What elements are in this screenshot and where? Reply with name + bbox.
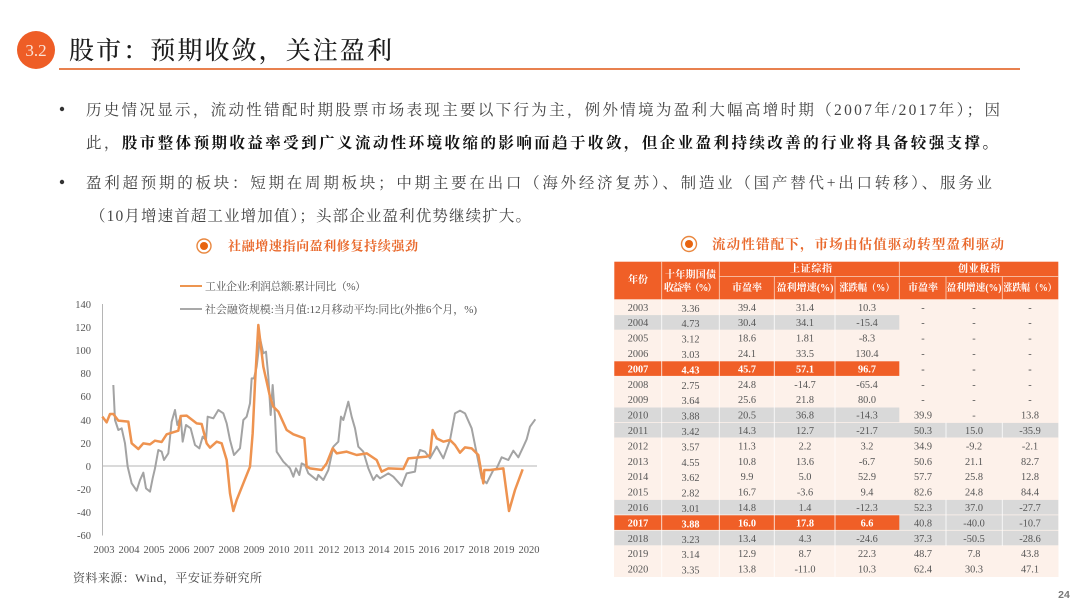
y axis labels: -60 (77, 531, 91, 542)
row 2016: 2016 (628, 503, 648, 514)
row 2013: 13.6 (796, 457, 814, 468)
row 2008: 2008 (628, 380, 648, 391)
row 2018: -50.5 (963, 534, 985, 545)
row 2003 (628, 303, 1032, 315)
row 2017 highlighted: -10.7 (1019, 518, 1041, 529)
row 2019: 8.7 (799, 549, 811, 560)
text block: bullet points: （10月增速首超工业增加值）；头部企业盈利优势继续扩大。 (90, 206, 531, 225)
row 2005: 3.12 (681, 335, 700, 346)
row 2018: 13.4 (738, 534, 756, 545)
row 2019: 43.8 (1021, 549, 1039, 560)
row 2009: 25.6 (738, 395, 756, 406)
row 2015: 9.4 (861, 488, 873, 499)
row 2010: 13.8 (1021, 411, 1039, 422)
table header: 创业板指 (958, 262, 1000, 275)
row 2014: 52.9 (858, 472, 876, 483)
row 2013: 82.7 (1021, 457, 1039, 468)
x axis labels: 2007 (194, 545, 214, 556)
row 2003: 10.3 (858, 303, 876, 314)
row 2019 (628, 549, 1039, 561)
x axis labels: 2009 (244, 545, 264, 556)
row 2007 highlighted: - (921, 364, 925, 375)
chart legend (180, 279, 477, 316)
row 2004: -15.4 (856, 318, 878, 329)
row 2012: -2.1 (1022, 441, 1038, 452)
row 2020: 47.1 (1021, 565, 1039, 576)
row 2006: - (972, 349, 976, 360)
x axis labels: 2018 (468, 545, 490, 556)
page number: 24 (1058, 589, 1070, 601)
row 2014: 9.9 (741, 472, 753, 483)
row 2020: -11.0 (794, 565, 816, 576)
table header: 上证综指 (790, 262, 832, 275)
x axis labels: 2005 (144, 545, 164, 556)
row 2016: 1.4 (799, 503, 811, 514)
y axis labels (75, 300, 91, 542)
row 2004: - (1028, 318, 1032, 329)
table header: 市盈率 (732, 282, 763, 294)
row 2008: -65.4 (856, 380, 878, 391)
table header: 十年期国债 (665, 268, 716, 281)
row 2013: 21.1 (965, 457, 983, 468)
text block: bullet points: 历史情况显示，流动性错配时期股票市场表现主要以下行为主，例外情境为盈利大幅高增时期（2007年/2017年）；因 (86, 100, 1000, 119)
row 2003: 39.4 (738, 303, 756, 314)
row 2007 highlighted: 2007 (628, 364, 648, 375)
row 2014: 12.8 (1021, 472, 1039, 483)
row 2009: - (1028, 395, 1032, 406)
row 2003: 31.4 (796, 303, 814, 314)
y axis labels: 120 (75, 323, 91, 334)
row 2013: 4.55 (681, 458, 700, 469)
row 2017 highlighted (614, 515, 1058, 530)
y axis labels: 0 (86, 462, 91, 473)
row 2014: 25.8 (965, 472, 983, 483)
row 2018: -24.6 (856, 534, 878, 545)
row 2017 highlighted: 16.0 (738, 518, 756, 529)
title underline (59, 68, 1020, 70)
x axis labels: 2013 (344, 545, 364, 556)
chart heading: 社融增速指向盈利修复持续强劲 (228, 238, 418, 254)
row 2020: 3.35 (681, 566, 700, 577)
x axis labels: 2011 (294, 545, 314, 556)
row 2005: - (972, 334, 976, 345)
row 2011: 12.7 (796, 426, 814, 437)
row 2015: 84.4 (1021, 488, 1039, 499)
table (614, 262, 1058, 577)
row 2016: 3.01 (681, 504, 700, 515)
row 2009: - (921, 395, 925, 406)
row 2012: 2012 (628, 441, 648, 452)
row 2010: 3.88 (681, 412, 700, 423)
row 2009: - (972, 395, 976, 406)
y axis labels: -40 (77, 508, 91, 519)
row 2003: - (921, 303, 925, 314)
row 2006: - (1028, 349, 1032, 360)
row 2015: 82.6 (914, 488, 932, 499)
row 2010: - (972, 411, 976, 422)
row 2009: 2009 (628, 395, 648, 406)
text block: bullet points: 盈利超预期的板块：短期在周期板块；中期主要在出口（海外经济复苏）、制造业（国产替代+出口转移）、服务业 (86, 173, 992, 192)
row 2010: -14.3 (856, 411, 878, 422)
row 2014: 5.0 (799, 472, 811, 483)
row 2006: 3.03 (681, 350, 700, 361)
row 2017 highlighted: -40.0 (963, 518, 985, 529)
row 2019: 3.14 (681, 550, 700, 561)
row 2016: 52.3 (914, 503, 932, 514)
row 2010: 39.9 (914, 411, 932, 422)
row 2014: 2014 (628, 472, 648, 483)
x axis labels: 2014 (368, 545, 390, 556)
row 2019: 48.7 (914, 549, 932, 560)
row 2011 (614, 423, 1058, 438)
row 2018: 4.3 (799, 534, 811, 545)
y axis labels: -20 (77, 485, 91, 496)
row 2012: 3.2 (861, 441, 873, 452)
row 2016: 14.8 (738, 503, 756, 514)
row 2014 (628, 472, 1039, 484)
row 2017 highlighted: 40.8 (914, 518, 932, 529)
row 2007 highlighted: - (1028, 364, 1032, 375)
row 2016 (614, 500, 1058, 515)
row 2008: - (1028, 380, 1032, 391)
x axis labels: 2017 (444, 545, 464, 556)
row 2009 (628, 395, 1032, 407)
row 2016: -27.7 (1019, 503, 1041, 514)
row 2017 highlighted: 2017 (628, 518, 648, 529)
text block: bullet points: 此，股市整体预期收益率受到广义流动性环境收缩的影响而趋于收敛，但企业盈利持续改善的行业将具备较强支撑。 (86, 133, 998, 153)
chart legend: 工业企业:利润总额:累计同比（%） (205, 279, 366, 293)
y axis labels: 100 (75, 346, 91, 357)
row 2011: 2011 (628, 426, 648, 437)
y axis labels: 20 (80, 439, 91, 450)
row 2011: -35.9 (1019, 426, 1041, 437)
row 2007 highlighted: 57.1 (796, 364, 814, 375)
row 2010: 2010 (628, 411, 648, 422)
row 2007 highlighted (614, 361, 1032, 376)
row 2008: 24.8 (738, 380, 756, 391)
series: industrial profit (orange) (102, 325, 523, 511)
table header: 年份 (628, 273, 648, 286)
row 2017 highlighted: 6.6 (861, 518, 873, 529)
row 2019: 2019 (628, 549, 648, 560)
row 2015: 24.8 (965, 488, 983, 499)
x axis labels: 2008 (218, 545, 240, 556)
x axis labels: 2010 (268, 545, 290, 556)
table header: 盈利增速(%) (776, 281, 834, 294)
row 2010: 36.8 (796, 411, 814, 422)
row 2016: 37.0 (965, 503, 983, 514)
chart source note: 资料来源：Wind，平安证券研究所 (73, 570, 262, 585)
row 2006 (628, 349, 1032, 361)
title: 股市：预期收敛，关注盈利 (69, 37, 392, 65)
table header (614, 262, 1058, 299)
row 2008: 2.75 (681, 381, 700, 392)
row 2009: 3.64 (681, 396, 700, 407)
row 2006: 130.4 (855, 349, 879, 360)
row 2013: -6.7 (859, 457, 875, 468)
row 2018 (614, 531, 1058, 546)
y axis labels: 140 (75, 300, 91, 311)
row 2019: 12.9 (738, 549, 756, 560)
row 2018: 37.3 (914, 534, 932, 545)
row 2014: 3.62 (681, 473, 700, 484)
x axis labels: 2016 (418, 545, 440, 556)
row 2020: 13.8 (738, 565, 756, 576)
row 2020: 30.3 (965, 565, 983, 576)
row 2005: 1.81 (796, 334, 814, 345)
row 2012: 3.57 (681, 442, 700, 453)
x axis labels (94, 545, 540, 556)
table background (614, 299, 1058, 577)
row 2006: 2006 (628, 349, 648, 360)
row 2008 (628, 380, 1032, 392)
row 2009: 80.0 (858, 395, 876, 406)
row 2018: -28.6 (1019, 534, 1041, 545)
row 2011: 50.3 (914, 426, 932, 437)
x axis labels: 2020 (518, 545, 540, 556)
row 2010 (614, 408, 1039, 423)
row 2020: 2020 (628, 565, 648, 576)
row 2008: - (972, 380, 976, 391)
section number badge (17, 31, 55, 69)
row 2020 (628, 565, 1039, 577)
row 2004: 34.1 (796, 318, 814, 329)
y axis labels: 60 (80, 392, 91, 403)
section number badge: 3.2 (25, 41, 47, 60)
row 2007 highlighted: 96.7 (858, 364, 876, 375)
row 2005: - (1028, 334, 1032, 345)
row 2020: 62.4 (914, 565, 932, 576)
row 2013: 2013 (628, 457, 648, 468)
row 2012: 11.3 (738, 441, 756, 452)
row 2007 highlighted: 4.43 (681, 365, 700, 376)
row 2015: 16.7 (738, 488, 756, 499)
row 2005: -8.3 (859, 334, 875, 345)
row 2003: 3.36 (681, 304, 700, 315)
x axis labels: 2003 (94, 545, 114, 556)
row 2006: 24.1 (738, 349, 756, 360)
table header: 涨跌幅（%） (1004, 281, 1056, 294)
row 2011: 3.42 (681, 427, 700, 438)
row 2018: 3.23 (681, 535, 700, 546)
row 2015: 2015 (628, 488, 648, 499)
row 2005: - (921, 334, 925, 345)
row 2004: 30.4 (738, 318, 756, 329)
x axis labels: 2019 (494, 545, 514, 556)
row 2013: 10.8 (738, 457, 756, 468)
row 2019: 7.8 (968, 549, 980, 560)
row 2007 highlighted: - (972, 364, 976, 375)
row 2005: 2005 (628, 334, 648, 345)
row 2015 (628, 488, 1039, 500)
row 2015: -3.6 (797, 488, 813, 499)
table header: 盈利增速(%) (946, 281, 1002, 294)
y axis labels: 80 (80, 369, 91, 380)
row 2007 highlighted: 45.7 (738, 364, 756, 375)
row 2004: - (972, 318, 976, 329)
table heading: 流动性错配下，市场由估值驱动转型盈利驱动 (712, 236, 1004, 253)
table header: 收益率（%） (664, 281, 717, 294)
x axis labels: 2012 (318, 545, 340, 556)
row 2006: - (921, 349, 925, 360)
row 2013 (628, 457, 1039, 469)
text block: bullet points (60, 100, 1000, 225)
y axis labels: 40 (80, 416, 91, 427)
row 2016: -12.3 (856, 503, 878, 514)
x axis labels: 2015 (394, 545, 414, 556)
table header: 市盈率 (908, 282, 939, 294)
table header: 涨跌幅（%） (840, 281, 894, 294)
line chart (75, 279, 540, 556)
row 2011: 14.3 (738, 426, 756, 437)
row 2017 highlighted: 3.88 (681, 519, 700, 530)
row 2003: 2003 (628, 303, 648, 314)
row 2011: -21.7 (856, 426, 878, 437)
row 2012: 34.9 (914, 441, 932, 452)
row 2008: -14.7 (794, 380, 816, 391)
series: social financing (gray) (113, 338, 535, 492)
row 2004: 2004 (628, 318, 648, 329)
row 2012 (628, 441, 1038, 453)
row 2003: - (1028, 303, 1032, 314)
row 2004 (614, 315, 1032, 330)
row 2010: 20.5 (738, 411, 756, 422)
row 2011: 15.0 (965, 426, 983, 437)
x axis labels: 2004 (118, 545, 140, 556)
row 2004: - (921, 318, 925, 329)
row 2004: 4.73 (681, 319, 700, 330)
row 2018: 2018 (628, 534, 648, 545)
axes (102, 304, 537, 536)
row 2012: 2.2 (799, 441, 811, 452)
row 2008: - (921, 380, 925, 391)
row 2003: - (972, 303, 976, 314)
row 2014: 57.7 (914, 472, 932, 483)
row 2009: 21.8 (796, 395, 814, 406)
chart legend: 社会融资规模:当月值:12月移动平均:同比(外推6个月，%) (205, 302, 477, 316)
row 2005 (628, 334, 1032, 346)
row 2013: 50.6 (914, 457, 932, 468)
row 2005: 18.6 (738, 334, 756, 345)
row 2020: 10.3 (858, 565, 876, 576)
x axis labels: 2006 (168, 545, 190, 556)
row 2017 highlighted: 17.8 (796, 518, 814, 529)
row 2012: -9.2 (966, 441, 982, 452)
row 2015: 2.82 (681, 489, 700, 500)
row 2019: 22.3 (858, 549, 876, 560)
row 2006: 33.5 (796, 349, 814, 360)
